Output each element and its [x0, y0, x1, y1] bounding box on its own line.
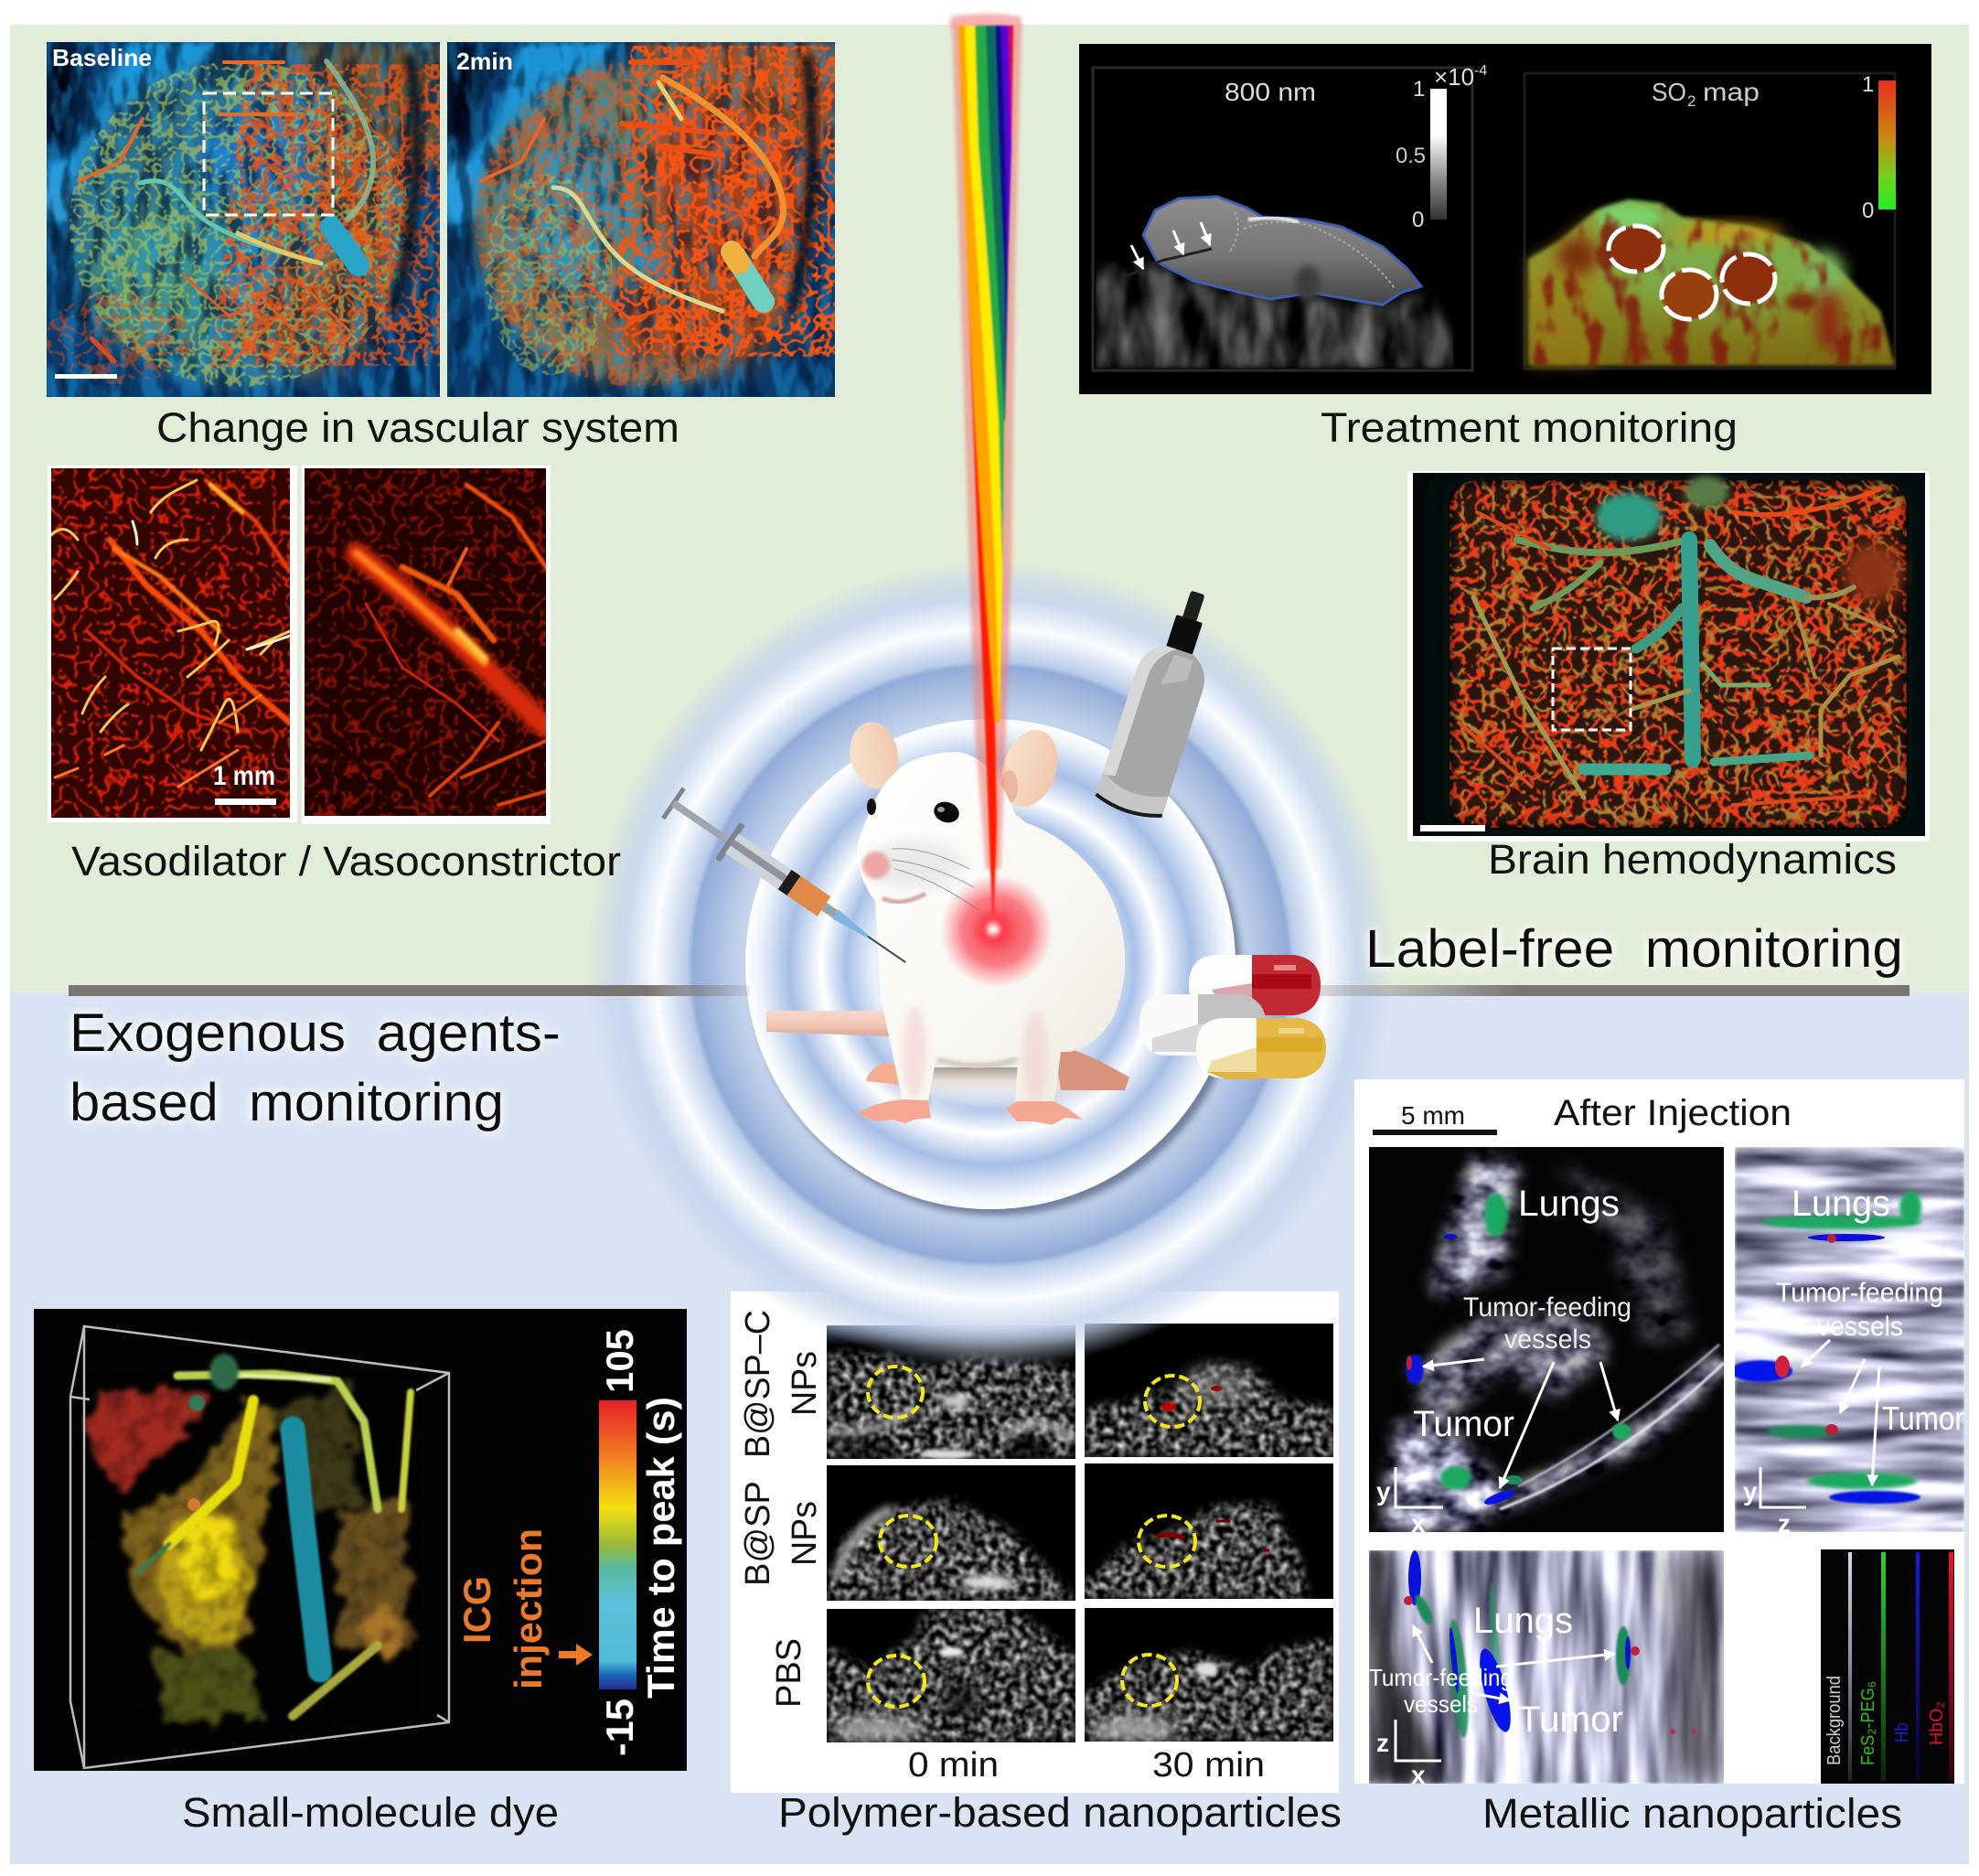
tumor outline — [1143, 197, 1421, 305]
heading: exogenous agents-based monitoring: based monitoring — [70, 1073, 504, 1132]
laser beam — [940, 14, 1054, 988]
mouse tail — [766, 1011, 892, 1036]
caption: polymer-based nanoparticles: Polymer-based nanoparticles — [778, 1789, 1342, 1836]
image: xy projection — [1369, 1147, 1724, 1538]
image: vasodilator: 1 mm — [213, 761, 275, 791]
image: ICG 3D time-to-peak — [34, 1309, 687, 1771]
image: xz projection — [1369, 1550, 1724, 1789]
image: 800 nm and SO2 map: 1 — [1413, 77, 1425, 102]
ultrasound: PBS 30 min — [1085, 1608, 1333, 1742]
beam glow — [949, 14, 1022, 869]
image: xz projection: z — [1376, 1729, 1389, 1757]
spectral legend: HbO₂ — [1927, 1701, 1947, 1745]
treatment circles — [1609, 226, 1775, 319]
scale bar — [1373, 1101, 1497, 1135]
time labels — [908, 1746, 1265, 1785]
image: 800 nm and SO2 map: 1 — [1862, 72, 1874, 97]
panel: polymer-based nanoparticles — [731, 1292, 1339, 1793]
scale bar: 5 mm — [1401, 1101, 1465, 1130]
row labels: B@SP — [739, 1481, 777, 1586]
image: yz projection: vessels — [1817, 1312, 1903, 1342]
image: xz projection: Lungs — [1473, 1601, 1573, 1641]
panel: metallic nanoparticles — [1354, 1079, 1964, 1789]
time labels: 0 min — [908, 1746, 999, 1785]
image: 800 nm and SO2 map: 0.5 — [1396, 144, 1426, 168]
image: 800 nm and SO2 map: 2 — [1687, 92, 1696, 110]
image: 800 nm and SO2 map — [1079, 44, 1931, 394]
image: ICG 3D time-to-peak: ICG — [455, 1576, 498, 1644]
contrast agent and hemoglobin signals — [1408, 1550, 1631, 1739]
image: 800 nm and SO2 map: ×10 — [1434, 63, 1474, 91]
spectral legend: FeS₂-PEG₆ — [1858, 1681, 1878, 1765]
panel: brain hemodynamics — [1407, 468, 1930, 883]
row labels — [739, 1310, 824, 1708]
image: ICG 3D time-to-peak: 105 — [598, 1329, 641, 1393]
spectral legend: Hb — [1892, 1722, 1912, 1742]
time labels: 30 min — [1152, 1746, 1265, 1785]
panel: treatment monitoring — [1079, 44, 1931, 451]
3D bounding box — [70, 1326, 449, 1768]
image: yz projection: Tumor — [1882, 1399, 1964, 1437]
image: 800 nm and SO2 map: 0 — [1412, 208, 1424, 232]
image: 800 nm and SO2 map: SO — [1652, 78, 1686, 106]
ultrasound: B@SP-C 0 min — [827, 1325, 1075, 1464]
mouse nose and mouth — [862, 852, 925, 902]
image: xz projection: Tumor-feeding — [1369, 1664, 1513, 1691]
image: 800 nm and SO2 map: 800 nm — [1225, 78, 1316, 106]
image: 800 nm and SO2 map: 0 — [1862, 198, 1874, 223]
mouse ears — [844, 717, 1067, 814]
image: xy projection: vessels — [1504, 1324, 1591, 1355]
caption: vasodilator / vasoconstrictor: Vasodilator / Vasoconstrictor — [71, 838, 621, 884]
ultrasound: B@SP 0 min — [827, 1465, 1075, 1601]
SO2 tissue — [1528, 199, 1895, 366]
mouse eyes — [867, 799, 962, 826]
caption: treatment monitoring: Treatment monitoring — [1321, 404, 1738, 451]
ultrasound: B@SP-C 30 min — [1085, 1324, 1333, 1457]
panel: small-molecule dye — [34, 1309, 687, 1836]
image: xz projection: vessels — [1404, 1690, 1478, 1718]
ultrasound: B@SP 30 min — [1085, 1463, 1333, 1599]
icon: syringe — [659, 784, 918, 981]
icon: bottle — [1094, 582, 1231, 821]
image: xy projection: Tumor — [1413, 1404, 1514, 1444]
caption: brain hemodynamics: Brain hemodynamics — [1488, 836, 1897, 883]
caption: small-molecule dye: Small-molecule dye — [182, 1789, 559, 1836]
row labels: B@SP–C — [739, 1310, 777, 1458]
800 nm tissue — [1096, 260, 1454, 369]
image: vasoconstrictor — [302, 466, 551, 824]
image: vasodilator — [48, 466, 297, 822]
image: xy projection: Lungs — [1518, 1184, 1620, 1224]
injection arrow — [559, 1644, 593, 1666]
image: 2 min vasculature: 2min — [456, 48, 513, 75]
heading: label-free monitoring: Label-free monitoring — [1365, 919, 1903, 979]
mouse front feet — [857, 1099, 1083, 1125]
mouse hind feet — [866, 1045, 1129, 1090]
row labels: PBS — [770, 1638, 808, 1708]
ultrasound: PBS 0 min — [827, 1609, 1075, 1742]
image: ICG 3D time-to-peak: Time to peak (s) — [639, 1397, 682, 1699]
red capsule — [1189, 955, 1321, 1015]
image: 800 nm and SO2 map: -4 — [1474, 63, 1487, 79]
time-to-peak color bar — [599, 1400, 636, 1689]
mouse body — [857, 752, 1125, 1102]
icon: pills — [1139, 955, 1326, 1079]
red glow at target — [940, 874, 1054, 988]
caption: metallic nanoparticles: Metallic nanoparticles — [1482, 1790, 1902, 1837]
white arrows — [1131, 222, 1210, 269]
image: yz projection — [1730, 1147, 1964, 1538]
background: exogenous agents region — [10, 992, 1969, 1864]
spectral legend — [1821, 1549, 1954, 1784]
mouse shading — [867, 841, 1048, 1102]
heading: exogenous agents-based monitoring — [70, 1003, 561, 1132]
image: xz projection: Tumor — [1518, 1699, 1623, 1740]
divider: left — [69, 985, 750, 996]
caption: change in vascular system: Change in vascular system — [156, 404, 679, 451]
image: baseline vasculature: Baseline — [52, 44, 152, 71]
background: label-free region — [10, 25, 1969, 992]
mouse — [766, 717, 1129, 1125]
image: 800 nm and SO2 map: map — [1703, 78, 1760, 106]
concentric rings — [561, 534, 1420, 1394]
image: yz projection: Lungs — [1792, 1184, 1890, 1224]
image: baseline vasculature — [42, 42, 440, 397]
image: xy projection: y — [1376, 1477, 1391, 1506]
image: ICG 3D time-to-peak: -15 — [598, 1699, 641, 1756]
image: xy projection: x — [1411, 1509, 1426, 1538]
panel: change in vascular system — [42, 42, 835, 451]
row labels: NPs — [786, 1501, 824, 1566]
image: brain vasculature — [1407, 468, 1930, 842]
image: 2 min vasculature — [443, 42, 835, 397]
image: yz projection: Tumor-feeding — [1776, 1278, 1943, 1308]
image: yz projection: z — [1778, 1509, 1791, 1538]
panel: vasodilator and vasoconstrictor — [48, 466, 621, 884]
divider: right — [1262, 985, 1909, 996]
image: yz projection: y — [1743, 1477, 1758, 1506]
image: xz projection: x — [1411, 1761, 1426, 1789]
heading: exogenous agents-based monitoring: Exogenous agents- — [70, 1003, 561, 1063]
ground shadow — [926, 1067, 1102, 1113]
gray capsule — [1139, 994, 1266, 1056]
yellow tumor circles — [868, 1367, 1200, 1707]
image: ICG 3D time-to-peak: injection — [507, 1528, 550, 1689]
dye volume — [85, 1381, 409, 1724]
yellow capsule — [1196, 1018, 1326, 1079]
image: xy projection: Tumor-feeding — [1463, 1292, 1631, 1323]
row labels: NPs — [786, 1351, 824, 1416]
spectral legend: Background — [1824, 1676, 1845, 1765]
title: after injection: After Injection — [1554, 1093, 1792, 1133]
